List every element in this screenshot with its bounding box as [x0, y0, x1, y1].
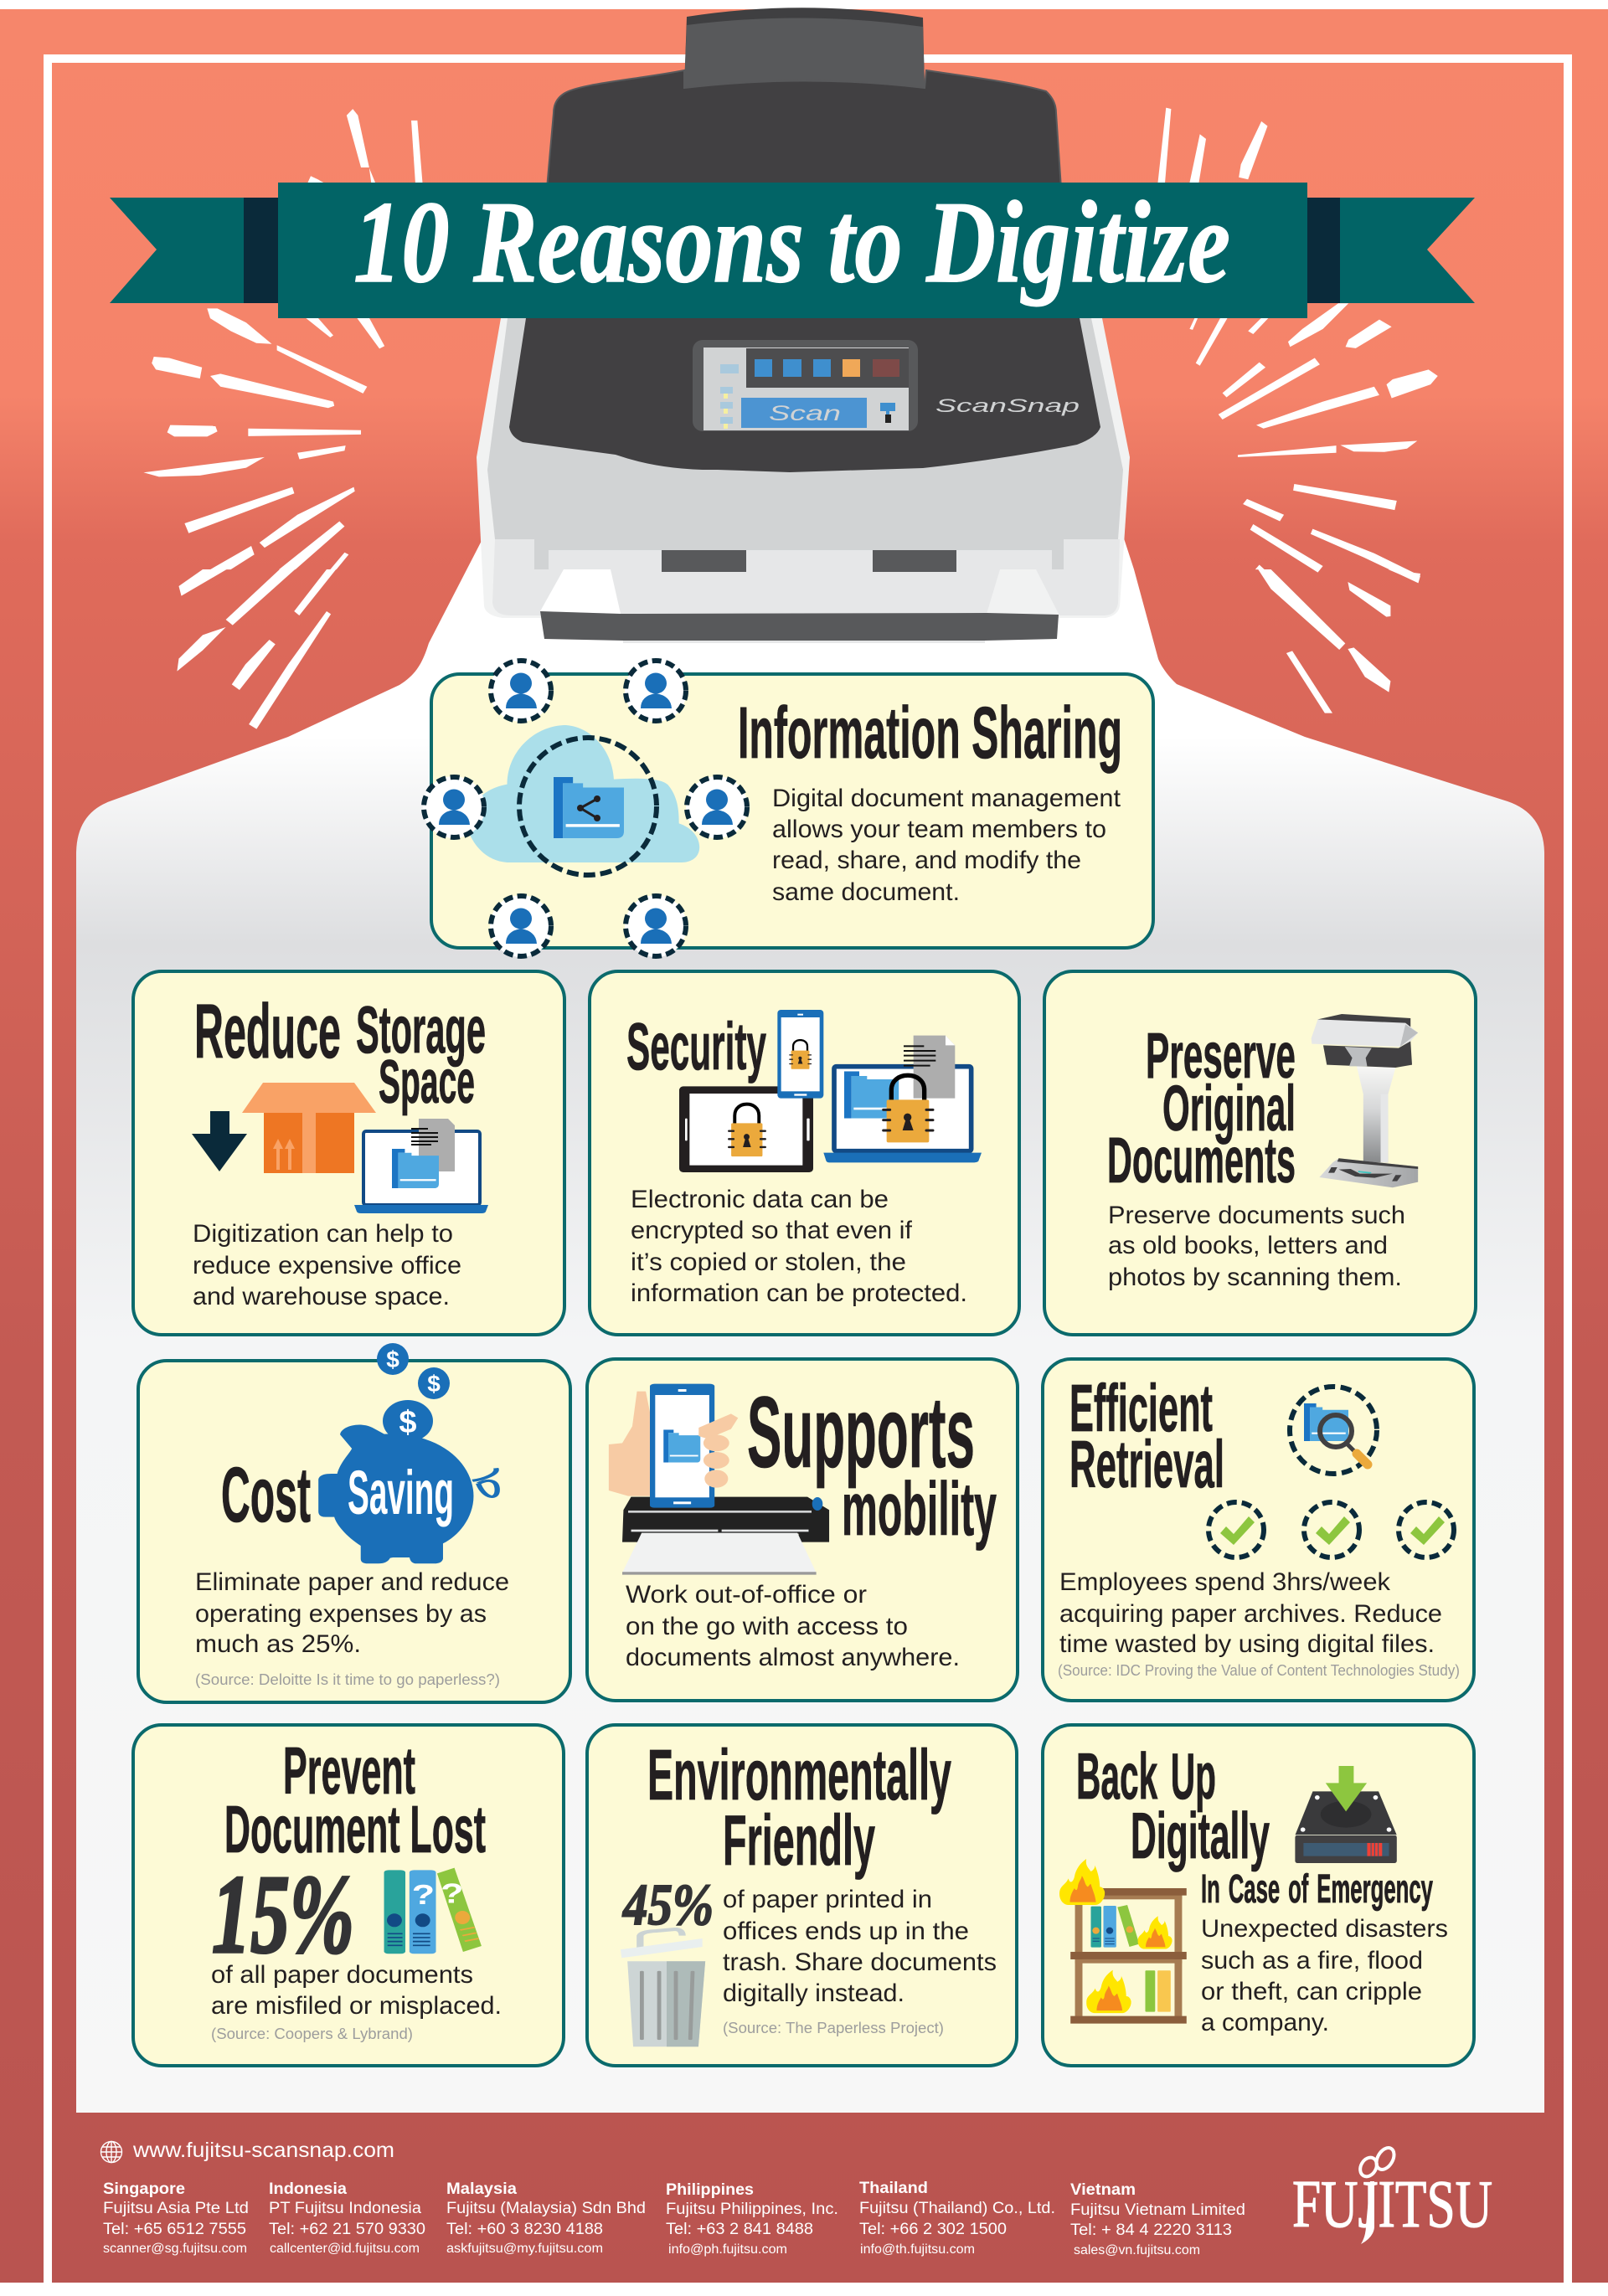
text block: Eliminate paper and reduce: [195, 1568, 509, 1596]
text block: [195, 1568, 509, 1658]
contact: Vietnam: sales@vn.fujitsu.com: [1074, 2243, 1200, 2257]
contact: Singapore: Singapore: [103, 2180, 185, 2198]
icon: folder search: [1290, 1387, 1377, 1474]
control panel: [693, 340, 918, 431]
contact: Vietnam: Fujitsu Vietnam Limited: [1070, 2201, 1245, 2219]
heading: [194, 989, 486, 1116]
icon: burning bookshelf: [1059, 1859, 1187, 2024]
text block: operating expenses by as: [195, 1600, 487, 1628]
text block: such as a fire, flood: [1201, 1947, 1423, 1974]
heading: Retrieval: [1069, 1427, 1224, 1501]
text block: Employees spend 3hrs/week: [1059, 1568, 1391, 1596]
heading: Space: [379, 1048, 475, 1116]
text block: of paper printed in: [723, 1886, 932, 1913]
contact: Singapore: scanner@sg.fujitsu.com: [103, 2242, 247, 2256]
contact: Indonesia: callcenter@id.fujitsu.com: [270, 2242, 420, 2256]
heading: [647, 1736, 951, 1881]
contact: Philippines: Fujitsu Philippines, Inc.: [666, 2201, 838, 2218]
text block: Digitization can help to: [193, 1220, 453, 1248]
contact: Philippines: Tel: +63 2 841 8488: [666, 2221, 813, 2238]
contact: Malaysia: Tel: +60 3 8230 4188: [446, 2221, 603, 2238]
text block: digitally instead.: [723, 1979, 904, 2007]
contact: Singapore: Tel: +65 6512 7555: [103, 2221, 246, 2238]
text block: Unexpected disasters: [1201, 1915, 1448, 1943]
heading: [1069, 1371, 1224, 1501]
contact: Philippines: Philippines: [666, 2181, 754, 2199]
contact: Vietnam: [1070, 2181, 1245, 2257]
text block: information can be protected.: [631, 1279, 967, 1307]
heading: saving: Saving: [348, 1458, 454, 1527]
panel: prevent document lost: [133, 1725, 564, 2066]
contact: Indonesia: Indonesia: [269, 2180, 347, 2198]
stat: 15%: 15%: [212, 1852, 354, 1976]
text block: [626, 1581, 960, 1671]
text block: offices ends up in the: [723, 1918, 969, 1945]
text block: allows your team members to: [772, 816, 1106, 843]
text block: [1108, 1202, 1405, 1291]
text block: on the go with access to: [626, 1613, 908, 1640]
text block: Preserve documents such: [1108, 1202, 1405, 1229]
text block: [193, 1220, 461, 1310]
icon: overhead scanner: [1312, 1014, 1418, 1187]
heading: Back Up: [1076, 1739, 1216, 1813]
text block: Digital document management: [772, 785, 1121, 812]
heading: Security: [626, 1009, 766, 1084]
heading: Reduce: [194, 989, 341, 1074]
text block: [631, 1186, 967, 1307]
source note: (Source: The Paperless Project): [723, 2020, 944, 2036]
icon: phone in hand over mobile scanner: [609, 1384, 829, 1575]
heading: [224, 1733, 486, 1866]
panel: cost saving: [138, 1343, 570, 1702]
source note: (Source: IDC Proving the Value of Content Technologies Study): [1058, 1662, 1460, 1679]
panel: reduce storage space: [133, 971, 564, 1335]
contact: Malaysia: Malaysia: [446, 2180, 517, 2198]
text block: and warehouse space.: [193, 1283, 450, 1310]
text block: [772, 785, 1121, 906]
contact: Vietnam: Tel: + 84 4 2220 3113: [1070, 2221, 1232, 2239]
text block: acquiring paper archives. Reduce: [1059, 1600, 1442, 1628]
icon: storage box: [242, 1083, 376, 1173]
heading: Digitally: [1131, 1799, 1270, 1872]
panel: security: [590, 971, 1019, 1335]
panel: preserve original documents: [1044, 971, 1476, 1335]
icon: laptop with folder: [354, 1119, 488, 1213]
contact: Indonesia: [269, 2180, 425, 2256]
heading: [1107, 1020, 1296, 1197]
heading: Friendly: [723, 1801, 875, 1881]
stat: 45%: 45%: [621, 1873, 714, 1938]
scanner lid: [547, 70, 1061, 188]
contact: Vietnam: Vietnam: [1070, 2181, 1136, 2199]
text block: [1059, 1568, 1442, 1658]
scan button label: Scan: [769, 402, 841, 425]
icon: down arrow: [192, 1111, 247, 1171]
contact: Thailand: [859, 2180, 1055, 2257]
text block: reduce expensive office: [193, 1252, 461, 1279]
source note: (Source: Deloitte Is it time to go paperless?): [195, 1671, 500, 1688]
text block: read, share, and modify the: [772, 847, 1081, 874]
icon: binders: [384, 1868, 482, 1954]
contact: Philippines: [666, 2181, 838, 2257]
heading: [747, 1375, 997, 1552]
panel: efficient retrieval: [1043, 1359, 1474, 1701]
feeder tray: [684, 8, 925, 88]
panel: back up digitally: [1043, 1725, 1474, 2066]
white light panel: [76, 536, 1544, 2113]
scanner body: [477, 318, 1130, 643]
title: 10 Reasons to Digitize: [353, 178, 1230, 307]
contact: Philippines: info@ph.fujitsu.com: [668, 2242, 787, 2257]
contact: Malaysia: [446, 2180, 646, 2256]
text block: Electronic data can be: [631, 1186, 889, 1213]
panel: information sharing: [423, 660, 1153, 957]
text block: as old books, letters and: [1108, 1232, 1388, 1259]
Fujitsu logo: FUJITSU: [1292, 2168, 1492, 2242]
heading: Prevent: [283, 1733, 415, 1808]
heading: Environmentally: [647, 1736, 951, 1815]
text block: time wasted by using digital files.: [1059, 1630, 1435, 1658]
icon: piggy bank with coins: [318, 1343, 497, 1563]
bottom white strip: [0, 2283, 1608, 2296]
heading: Original: [1162, 1073, 1296, 1145]
heading: Information Sharing: [738, 692, 1122, 774]
text block: documents almost anywhere.: [626, 1644, 960, 1671]
contact: Malaysia: Fujitsu (Malaysia) Sdn Bhd: [446, 2200, 646, 2217]
text block: photos by scanning them.: [1108, 1264, 1402, 1291]
icon: check marks: [1209, 1502, 1454, 1557]
text block: trash. Share documents: [723, 1949, 997, 1976]
source note: (Source: Coopers & Lybrand): [211, 2026, 413, 2042]
contact: Thailand: Thailand: [859, 2180, 928, 2197]
contact: Thailand: Tel: +66 2 302 1500: [859, 2221, 1007, 2238]
icon: trash can: [621, 1929, 705, 2046]
heading: [1076, 1739, 1270, 1872]
dark shroud: [509, 318, 1100, 472]
heading: Storage: [356, 992, 486, 1067]
ScanSnap brand: ScanSnap: [935, 395, 1080, 416]
contact: Singapore: Fujitsu Asia Pte Ltd: [103, 2200, 249, 2217]
text block: [723, 1886, 997, 2007]
text block: a company.: [1201, 2009, 1329, 2036]
contact: Malaysia: askfujitsu@my.fujitsu.com: [446, 2242, 603, 2256]
contact: Indonesia: PT Fujitsu Indonesia: [269, 2200, 421, 2217]
icon: cloud folder share: [468, 725, 699, 875]
text block: are misfiled or misplaced.: [211, 1992, 502, 2020]
icon: devices with locks: [679, 1010, 982, 1172]
text block: of all paper documents: [211, 1961, 473, 1989]
scanner illustration: [477, 8, 1130, 643]
icon: piggy bank with coins: $: [427, 1371, 441, 1397]
text block: it’s copied or stolen, the: [631, 1248, 906, 1276]
contact: Thailand: Fujitsu (Thailand) Co., Ltd.: [859, 2200, 1055, 2217]
heading: Preserve: [1146, 1020, 1296, 1092]
icon: team members: [423, 660, 748, 957]
icon: piggy bank with coins: $: [386, 1346, 399, 1372]
title ribbon: [110, 178, 1475, 318]
text block: Work out-of-office or: [626, 1581, 867, 1609]
contact: Indonesia: Tel: +62 21 570 9330: [269, 2221, 425, 2238]
text block: or theft, can cripple: [1201, 1978, 1422, 2005]
icon: binders: ?: [441, 1878, 463, 1909]
contact: Singapore: [103, 2180, 249, 2256]
text block: encrypted so that even if: [631, 1217, 913, 1244]
heading: Documents: [1107, 1125, 1296, 1197]
text block: [211, 1961, 502, 2020]
Fujitsu logo: [1292, 2144, 1492, 2244]
text block: same document.: [772, 878, 960, 906]
burst rays: [143, 108, 1438, 729]
heading: mobility: [842, 1468, 997, 1552]
icon: hard drive with download arrow: [1295, 1766, 1397, 1863]
icon: piggy bank with coins: $: [399, 1405, 417, 1440]
icon: binders: ?: [412, 1879, 435, 1911]
website: www.fujitsu-scansnap.com: [132, 2139, 394, 2162]
heading: Supports: [747, 1375, 975, 1489]
panel: environmentally friendly: [587, 1725, 1017, 2066]
heading: cost: Cost: [221, 1451, 311, 1538]
contact: Thailand: info@th.fujitsu.com: [860, 2242, 975, 2257]
icon: globe: [100, 2142, 122, 2162]
text block: much as 25%.: [195, 1630, 361, 1658]
heading: Document Lost: [224, 1792, 486, 1866]
heading: Efficient: [1069, 1371, 1213, 1445]
footer: [100, 2139, 1492, 2257]
text block: [1201, 1915, 1448, 2036]
panel: supports mobility: [587, 1359, 1018, 1701]
